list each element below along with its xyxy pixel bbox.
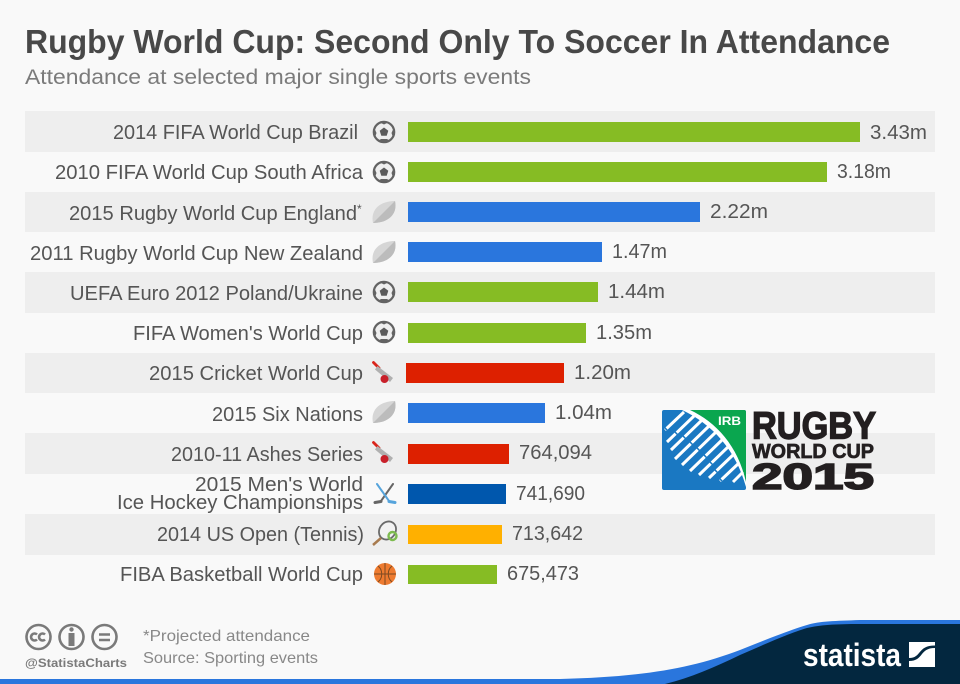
row: FIBA Basketball World Cup: FIBA Basketball World Cup: [120, 564, 363, 586]
row: 2015 Cricket World Cup: 2015 Cricket World Cup: [149, 363, 363, 385]
row: 2011 Rugby World Cup New Zealand: 1.47m: [612, 241, 667, 263]
row: 2010 FIFA World Cup South Africa: [55, 161, 891, 184]
row: 2011 Rugby World Cup New Zealand: 2011 Rugby World Cup New Zealand: [30, 243, 363, 265]
row: 2015 Men's World Ice Hockey Championships: 2015 Men's World: [195, 474, 363, 496]
row: 2015 Rugby World Cup England: *: [357, 202, 362, 216]
row: UEFA Euro 2012 Poland/Ukraine: UEFA Euro 2012 Poland/Ukraine: [70, 283, 363, 305]
row: 2014 US Open (Tennis): 2014 US Open (Tennis): [157, 524, 364, 546]
row: FIFA Women's World Cup: [133, 322, 652, 345]
row: 2015 Six Nations: [212, 401, 612, 426]
row: 2014 FIFA World Cup Brazil: [25, 111, 935, 152]
row: 2015 Rugby World Cup England: 2.22m: [710, 201, 768, 223]
row: 2015 Rugby World Cup England: 2015 Rugby World Cup England: [69, 203, 357, 225]
row: 2015 Cricket World Cup: [25, 353, 935, 393]
row: 2010 FIFA World Cup South Africa: 3.18m: [837, 161, 891, 183]
row: FIFA Women's World Cup: FIFA Women's World Cup: [133, 323, 363, 345]
creative commons icons: [26, 625, 116, 649]
row: FIBA Basketball World Cup: [120, 563, 579, 586]
row: 2015 Men's World Ice Hockey Championships: [117, 474, 585, 514]
row: 2014 FIFA World Cup Brazil: 3.43m: [870, 122, 927, 144]
row: 2014 US Open (Tennis): [25, 514, 935, 555]
logo: Rugby World Cup 2015: 2015: [752, 456, 874, 497]
footnote: *Projected attendance: [143, 628, 310, 645]
row: 2015 Cricket World Cup: 1.20m: [574, 362, 631, 384]
footer wave: [0, 620, 960, 684]
row: FIFA Women's World Cup: 1.35m: [596, 322, 652, 344]
row: 2010 FIFA World Cup South Africa: 2010 FIFA World Cup South Africa: [55, 162, 364, 184]
subtitle: Attendance at selected major single sports events: [25, 66, 531, 89]
row: 2015 Six Nations: 2015 Six Nations: [212, 404, 363, 426]
row: 2014 US Open (Tennis): 713,642: [512, 523, 583, 545]
row: 2010-11 Ashes Series: 764,094: [519, 442, 592, 464]
row: 2015 Six Nations: 1.04m: [555, 402, 612, 424]
logo: Rugby World Cup 2015: [662, 406, 876, 497]
row: FIBA Basketball World Cup: 675,473: [507, 563, 579, 585]
row: 2010-11 Ashes Series: 2010-11 Ashes Series: [171, 444, 363, 466]
logo: Rugby World Cup 2015: RUGBY: [752, 406, 876, 448]
row: UEFA Euro 2012 Poland/Ukraine: 1.44m: [608, 281, 665, 303]
row: 2015 Rugby World Cup England: [25, 192, 935, 232]
logo: Rugby World Cup 2015: WORLD CUP: [752, 441, 874, 463]
source: Source: Sporting events: [143, 650, 318, 667]
handle: @StatistaCharts: [25, 656, 127, 670]
title: Rugby World Cup: Second Only To Soccer In Attendance: [25, 23, 890, 60]
row: UEFA Euro 2012 Poland/Ukraine: [25, 272, 935, 313]
row: 2015 Men's World Ice Hockey Championships: Ice Hockey Championships: [117, 492, 363, 514]
statista logo: statista: [803, 637, 901, 673]
row: 2010-11 Ashes Series: [25, 433, 935, 474]
row: 2014 FIFA World Cup Brazil: 2014 FIFA World Cup Brazil: [113, 122, 358, 144]
row: 2011 Rugby World Cup New Zealand: [30, 241, 667, 265]
logo: Rugby World Cup 2015: IRB: [718, 414, 741, 428]
row: 2015 Men's World Ice Hockey Championships: 741,690: [516, 483, 585, 505]
